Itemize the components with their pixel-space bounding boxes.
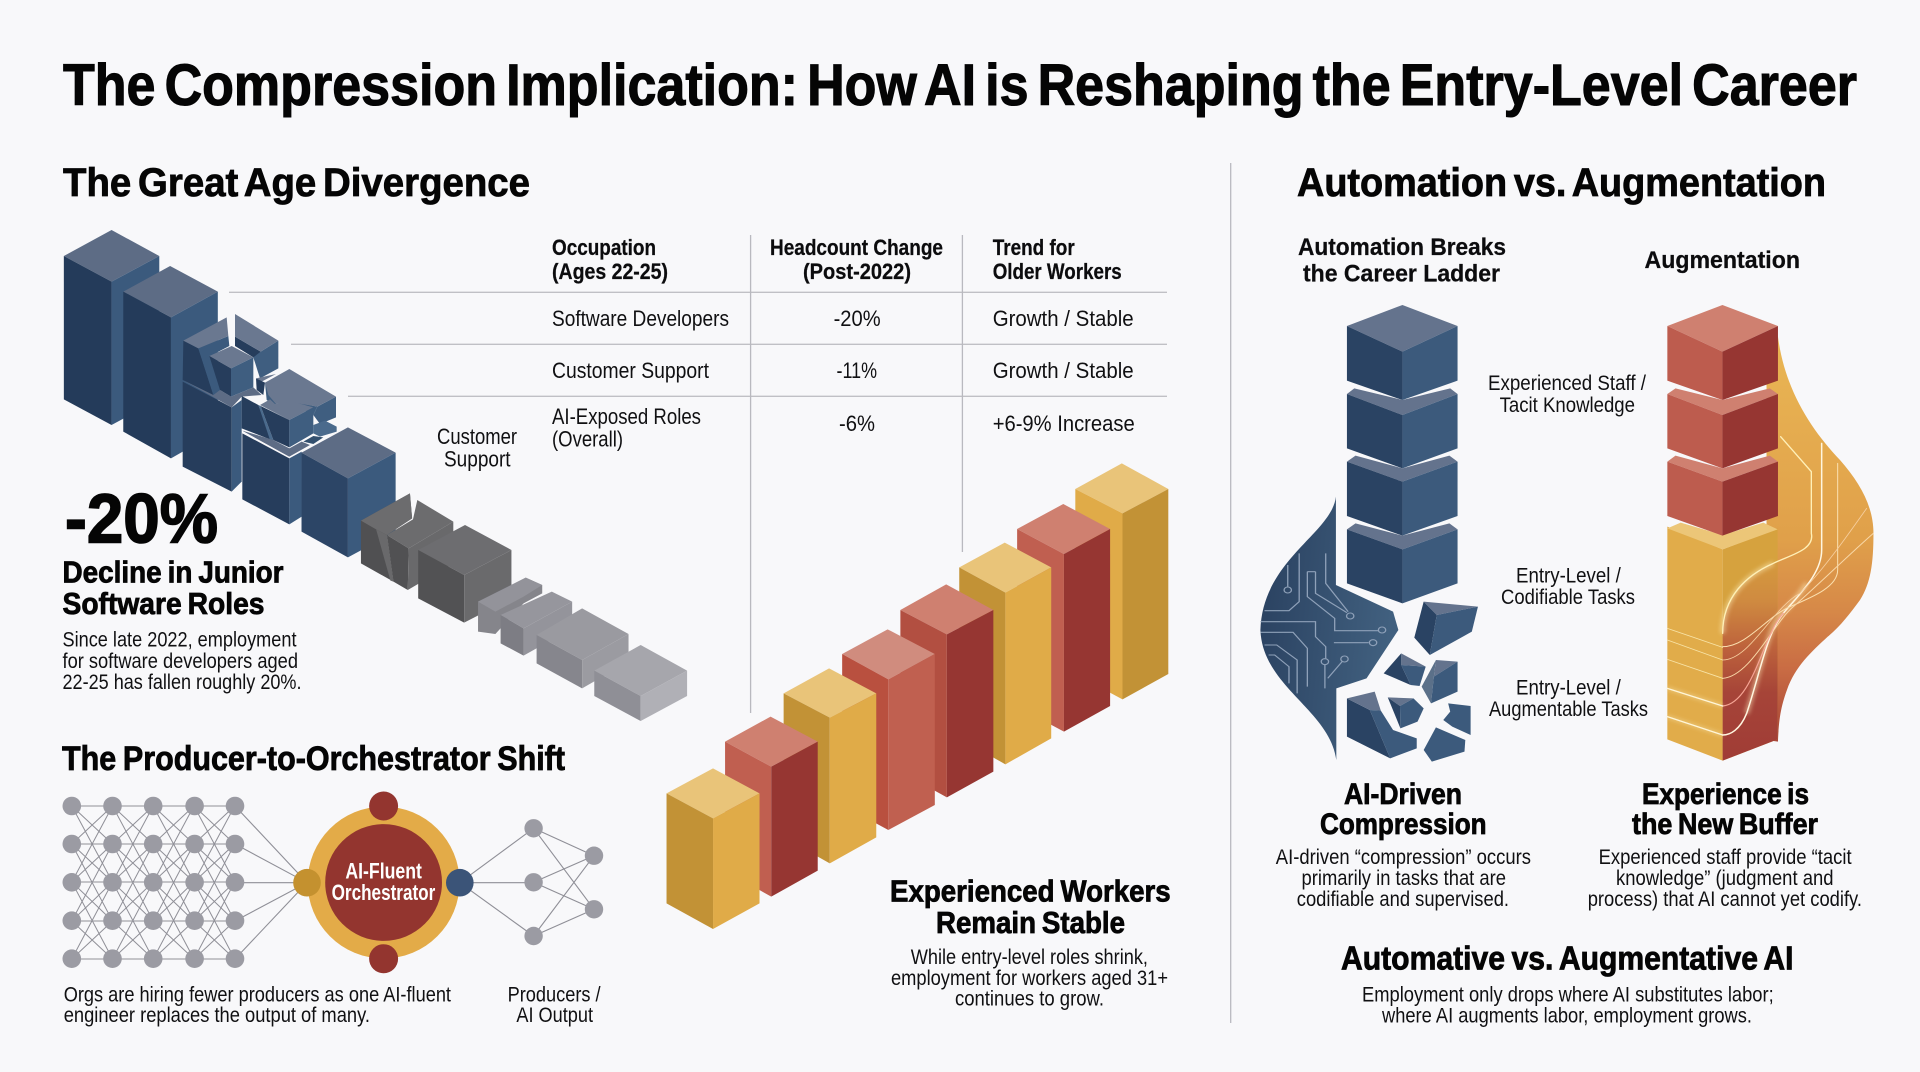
text: AI-Driven Compression: primarily in tasks that are xyxy=(1302,867,1506,890)
text: Experienced Workers Remain Stable xyxy=(890,874,1171,1011)
comparison table: Trend for xyxy=(993,235,1075,260)
text: AI-Driven Compression: codifiable and supervised. xyxy=(1297,888,1509,911)
caption: producers xyxy=(64,984,451,1027)
caption: producers: engineer replaces the output of many. xyxy=(64,1004,370,1027)
text: Experienced Workers Remain Stable: employment for workers aged 31+ xyxy=(891,967,1168,990)
comparison table: Occupation xyxy=(552,235,656,260)
stat: -20% decline: 22-25 has fallen roughly 20%. xyxy=(62,671,302,694)
text: Experience is the New Buffer: Experience is xyxy=(1642,778,1809,811)
stat: -20% decline: Since late 2022, employment xyxy=(62,629,297,652)
subheading: Automation Breaks the Career Ladder xyxy=(1298,234,1506,288)
labels: task types xyxy=(1488,372,1648,721)
comparison table: -11% xyxy=(836,358,877,383)
automation column with circuit and broken blocks xyxy=(1260,305,1478,762)
subheading: Automation Breaks the Career Ladder: the Career Ladder xyxy=(1303,261,1500,288)
text: Automative vs. Augmentative AI: Automative vs. Augmentative AI xyxy=(1341,939,1794,976)
label: Customer Support: Customer xyxy=(437,424,517,449)
comparison table: (Post-2022) xyxy=(803,259,911,284)
heading: Producer-to-Orchestrator Shift: The Producer-to-Orchestrator Shift xyxy=(62,740,565,778)
comparison table: Software Developers xyxy=(552,306,729,331)
text: Experienced Workers Remain Stable: Experienced Workers xyxy=(890,874,1171,909)
labels: task types: Entry-Level / xyxy=(1516,676,1621,699)
labels: task types: Tacit Knowledge xyxy=(1500,394,1635,417)
text: Experience is the New Buffer: Experienced staff provide “tacit xyxy=(1599,846,1852,869)
text: Experience is the New Buffer xyxy=(1588,778,1862,911)
text: AI-Driven Compression: AI-Driven xyxy=(1344,778,1462,811)
stat: -20% decline: -20% xyxy=(65,480,218,558)
stat: -20% decline: Decline in Junior xyxy=(62,555,284,590)
comparison table: Growth / Stable xyxy=(993,306,1134,331)
heading: The Great Age Divergence: The Great Age Divergence xyxy=(63,161,530,205)
comparison table: +6-9% Increase xyxy=(993,411,1135,436)
text: AI-Driven Compression xyxy=(1276,778,1531,911)
stat: -20% decline: Software Roles xyxy=(62,586,264,621)
comparison table: Older Workers xyxy=(993,259,1122,284)
label: Producers / AI Output xyxy=(508,984,601,1027)
label: Producers / AI Output: AI Output xyxy=(516,1004,593,1027)
network diagram: producers to orchestrator: Orchestrator xyxy=(332,880,436,905)
comparison table: (Ages 22-25) xyxy=(552,259,668,284)
comparison table: (Overall) xyxy=(552,426,623,452)
text: AI-Driven Compression: Compression xyxy=(1320,808,1487,841)
stat: -20% decline: for software developers aged xyxy=(62,650,298,673)
comparison table: AI-Exposed Roles xyxy=(552,404,701,429)
labels: task types: Codifiable Tasks xyxy=(1501,586,1635,609)
network diagram: producers to orchestrator: AI-Fluent xyxy=(345,858,422,883)
declining stacked bars chart xyxy=(64,230,687,721)
text: Experience is the New Buffer: knowledge” (judgment and xyxy=(1616,867,1834,890)
subheading: Automation Breaks the Career Ladder: Automation Breaks xyxy=(1298,234,1506,261)
comparison table xyxy=(229,235,1167,713)
labels: task types: Entry-Level / xyxy=(1516,565,1621,588)
label: Customer Support: Support xyxy=(444,447,511,472)
text: Experienced Workers Remain Stable: continues to grow. xyxy=(955,988,1104,1011)
caption: producers: Orgs are hiring fewer producers as one AI-fluent xyxy=(64,984,451,1007)
label: Producers / AI Output: Producers / xyxy=(508,984,601,1007)
text: Automative vs. Augmentative AI: Employment only drops where AI substitutes labor; xyxy=(1362,984,1774,1007)
comparison table: Customer Support xyxy=(552,358,709,383)
text: Experienced Workers Remain Stable: Remain Stable xyxy=(936,905,1125,940)
network diagram: producers to orchestrator xyxy=(63,792,603,973)
rising bars chart xyxy=(667,463,1168,929)
stat: -20% decline xyxy=(62,480,302,694)
subheading: Augmentation: Augmentation xyxy=(1644,247,1800,274)
text: Experience is the New Buffer: the New Buffer xyxy=(1632,808,1818,841)
text: Experience is the New Buffer: process) that AI cannot yet codify. xyxy=(1588,888,1862,911)
text: AI-Driven Compression: AI-driven “compression” occurs xyxy=(1276,846,1531,869)
comparison table: Headcount Change xyxy=(770,235,943,260)
labels: task types: Experienced Staff / xyxy=(1488,372,1646,395)
text: Automative vs. Augmentative AI xyxy=(1341,939,1794,1028)
heading: Automation vs. Augmentation: Automation vs. Augmentation xyxy=(1297,161,1826,205)
labels: task types: Augmentable Tasks xyxy=(1489,698,1648,721)
label: Customer Support xyxy=(437,424,517,472)
text: Experienced Workers Remain Stable: While entry-level roles shrink, xyxy=(911,946,1148,969)
comparison table: Growth / Stable xyxy=(993,358,1134,383)
comparison table: -20% xyxy=(834,306,881,331)
text: Automative vs. Augmentative AI: where AI augments labor, employment grows. xyxy=(1381,1005,1752,1028)
augmentation column with flowing buffer xyxy=(1667,305,1873,761)
comparison table: -6% xyxy=(839,411,875,436)
